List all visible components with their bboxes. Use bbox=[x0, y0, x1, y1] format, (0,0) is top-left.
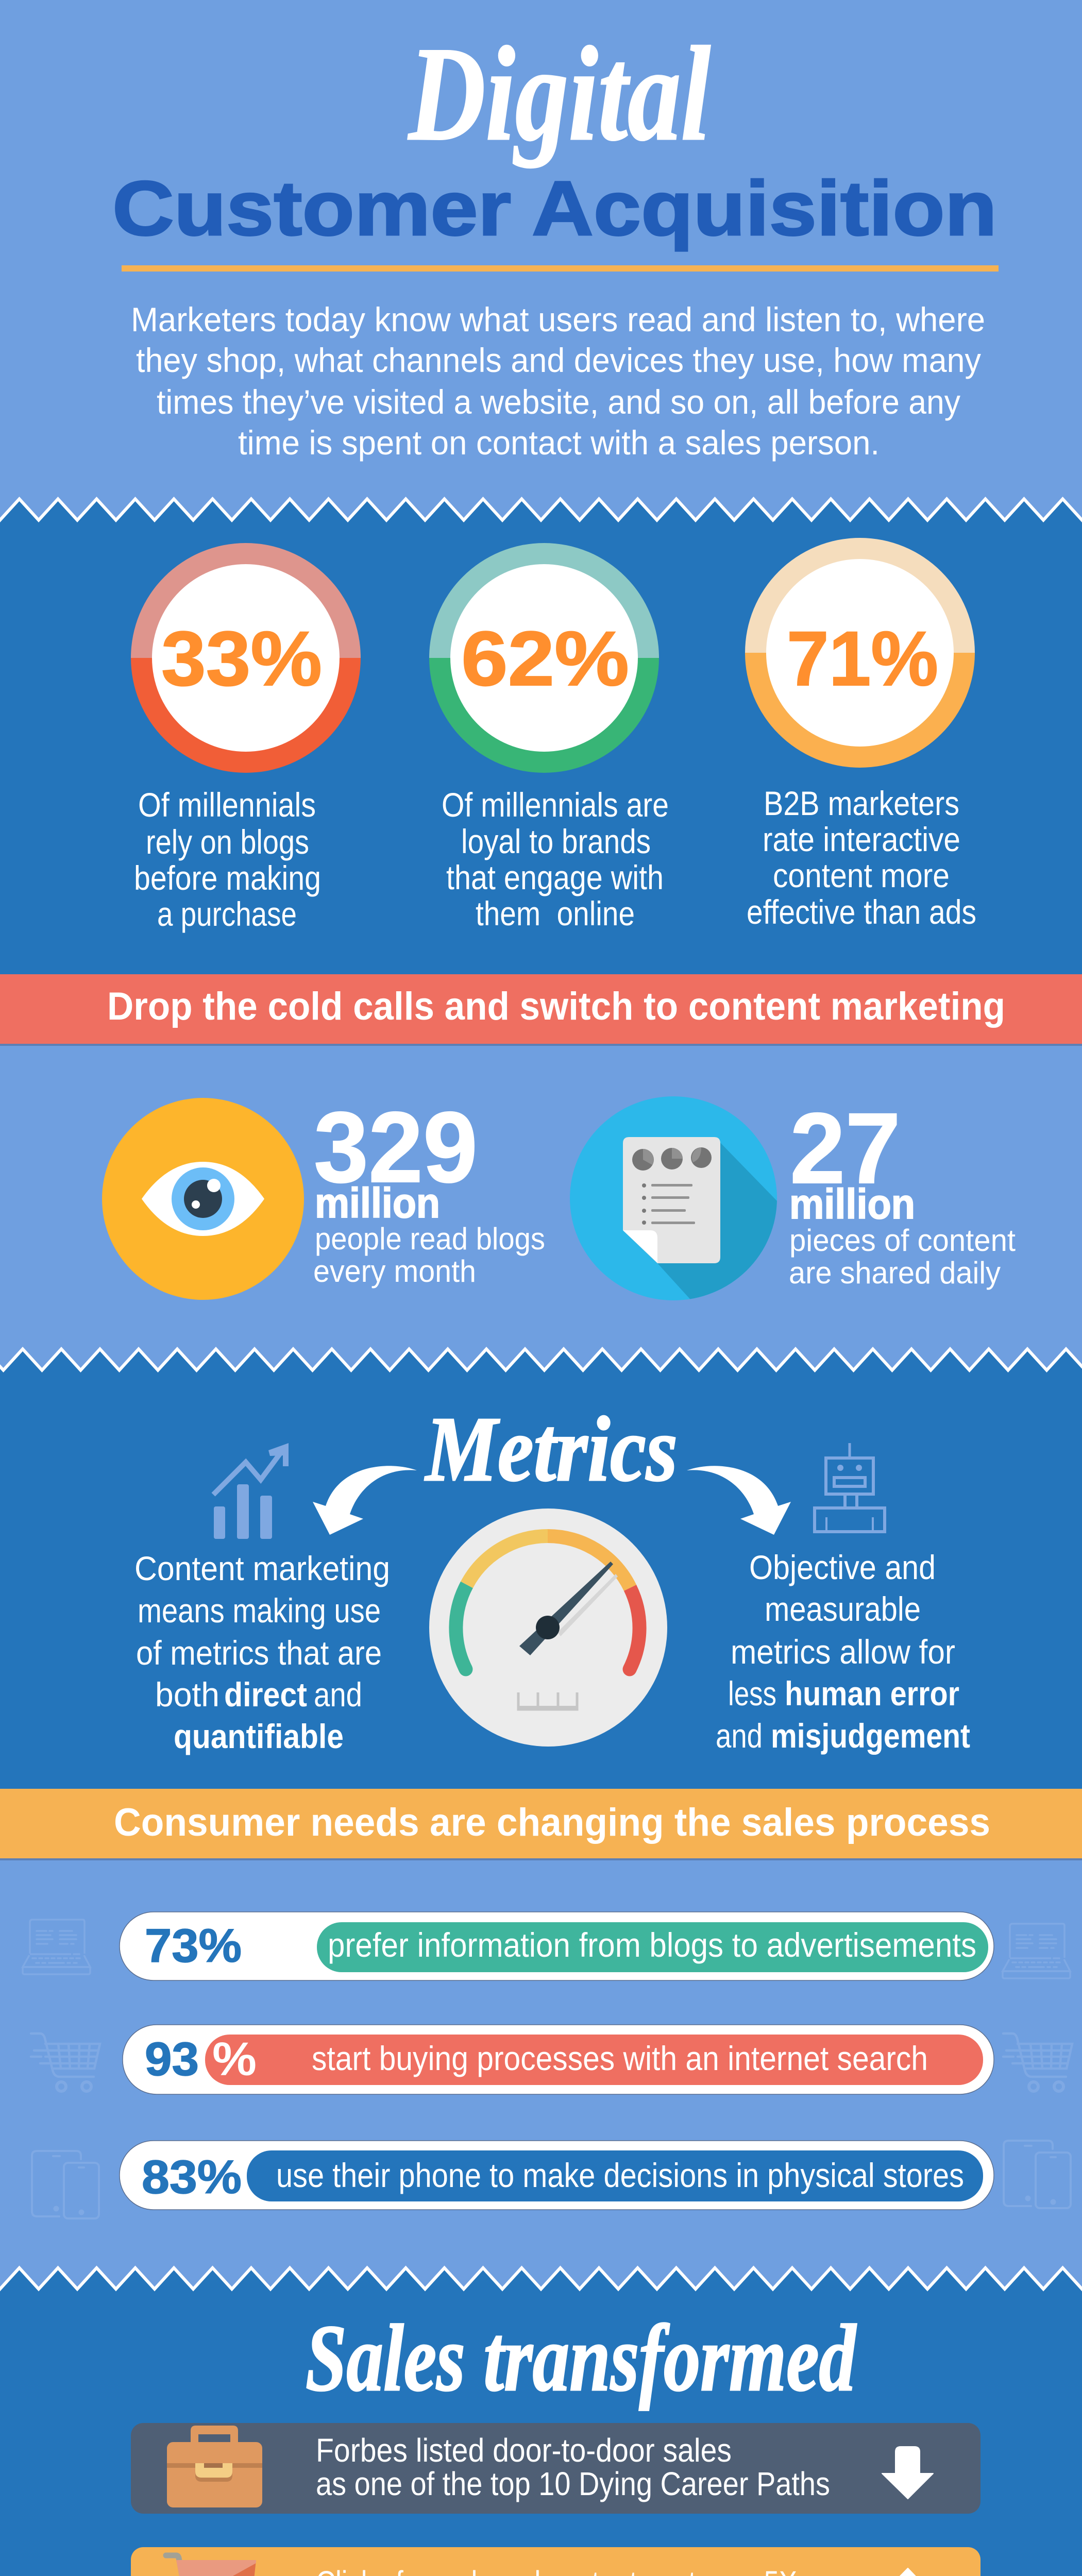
title underline bbox=[122, 265, 999, 272]
stat: 329 million: million bbox=[315, 1180, 440, 1227]
stat: 27 million: 27 bbox=[790, 1092, 901, 1205]
icon: speedometer gauge bbox=[429, 1509, 667, 1747]
icon: faint laptop right bbox=[1003, 1924, 1070, 1978]
panel: millennial statistics bbox=[0, 499, 1082, 974]
icon: faint laptop left bbox=[23, 1920, 90, 1974]
stat text: 33%: a purchase bbox=[157, 895, 297, 933]
arrow: down bbox=[882, 2447, 933, 2499]
text: content marketing metrics: Content marketing bbox=[134, 1549, 390, 1587]
arrow: up bbox=[882, 2568, 933, 2576]
pill: 93%: 93 bbox=[145, 2033, 199, 2086]
stat text: 71%: rate interactive bbox=[763, 820, 960, 858]
icon: growth chart bbox=[213, 1443, 289, 1539]
pill: 83%: 83% bbox=[142, 2151, 242, 2204]
icon: faint cart left bbox=[31, 2033, 100, 2091]
row: door-to-door sales bbox=[131, 2423, 980, 2514]
stat text: 33% bbox=[134, 786, 321, 933]
title: Customer Acquisition: Customer Acquisition bbox=[112, 165, 997, 251]
stat text: 33%: rely on blogs bbox=[146, 823, 309, 861]
stat: 27 million: pieces of content bbox=[789, 1223, 1016, 1258]
stat text: 71%: content more bbox=[773, 856, 950, 894]
icon: eye bbox=[102, 1098, 304, 1300]
text: objective metrics: measurable bbox=[765, 1590, 921, 1628]
arrow: right curved bbox=[687, 1466, 791, 1535]
icon: briefcase bbox=[167, 2426, 262, 2507]
pill: 73% bbox=[120, 1912, 994, 1980]
stat ring: 71% bbox=[745, 538, 975, 768]
text: objective metrics: metrics allow for bbox=[731, 1633, 955, 1671]
stat text: 62%: them online bbox=[476, 894, 635, 933]
text: content marketing metrics: direct bbox=[224, 1675, 307, 1714]
text: content marketing metrics: quantifiable bbox=[174, 1717, 344, 1755]
text: objective metrics: Objective and bbox=[749, 1548, 936, 1586]
stat text: 33%: before making bbox=[134, 859, 321, 897]
panel: sales transformed bbox=[0, 2268, 1082, 2576]
stat text: 33%: Of millennials bbox=[138, 786, 316, 824]
pill: 93% bbox=[123, 2025, 994, 2094]
text: objective metrics: human error bbox=[785, 1674, 959, 1713]
panel: consumer needs pills bbox=[23, 1912, 1072, 2218]
stat: 27 million: are shared daily bbox=[789, 1256, 1001, 1290]
intro paragraph: time is spent on contact with a sales person. bbox=[238, 423, 880, 462]
stat: 329 million bbox=[313, 1091, 545, 1289]
text: content marketing metrics: both bbox=[155, 1675, 219, 1714]
stat ring: 62% bbox=[429, 543, 659, 773]
text: content marketing metrics: means making use bbox=[138, 1591, 381, 1630]
intro paragraph: Marketers today know what users read and listen to, where bbox=[131, 300, 985, 338]
icon: faint devices right bbox=[1004, 2141, 1071, 2208]
stat: 27 million: million bbox=[789, 1181, 915, 1228]
title: Digital: Digital bbox=[407, 19, 711, 168]
header section bbox=[112, 19, 999, 462]
icon: faint devices left bbox=[32, 2151, 99, 2218]
stat: 329 million: people read blogs bbox=[315, 1222, 545, 1256]
row: shared content clicks bbox=[131, 2547, 980, 2576]
icon: shopping cart bbox=[166, 2555, 258, 2576]
text: content marketing metrics bbox=[134, 1549, 390, 1755]
intro paragraph: they shop, what channels and devices they use, how many bbox=[136, 341, 981, 379]
heading: Sales transformed: Sales transformed bbox=[306, 2306, 857, 2411]
text: content marketing metrics: of metrics that are bbox=[136, 1634, 382, 1672]
stat text: 71%: effective than ads bbox=[747, 893, 976, 931]
pill: 83%: use their phone to make decisions in physical stores bbox=[276, 2156, 964, 2194]
row: door-to-door sales: Forbes listed door-to-door sales bbox=[316, 2432, 732, 2469]
intro paragraph bbox=[131, 300, 985, 462]
stat text: 71% bbox=[747, 784, 976, 931]
stat ring: 62%: 62% bbox=[461, 615, 629, 702]
pill: 73%: 73% bbox=[145, 1920, 242, 1972]
pill: 93%: % bbox=[212, 2033, 257, 2086]
pill: 83% bbox=[120, 2141, 994, 2210]
banner: consumer needs bbox=[0, 1789, 1082, 1860]
text: objective metrics bbox=[716, 1548, 970, 1755]
stat text: 62%: Of millennials are bbox=[442, 786, 669, 824]
stat text: 62%: that engage with bbox=[446, 858, 664, 896]
stat: 27 million bbox=[789, 1092, 1016, 1290]
stat ring: 33%: 33% bbox=[161, 615, 322, 702]
banner: cold calls: Drop the cold calls and switch to content marketing bbox=[107, 985, 1005, 1028]
stat: 329 million: every month bbox=[313, 1254, 476, 1289]
text: objective metrics: less bbox=[728, 1674, 776, 1713]
stat ring: 33% bbox=[131, 543, 361, 773]
row: door-to-door sales: as one of the top 10 Dying Career Paths bbox=[316, 2465, 830, 2502]
panel: blog and content statistics bbox=[102, 1091, 1016, 1303]
text: objective metrics: and bbox=[716, 1717, 763, 1755]
intro paragraph: times they’ve visited a website, and so on, all before any bbox=[157, 383, 960, 421]
heading: Metrics: Metrics bbox=[424, 1398, 678, 1500]
icon: faint cart right bbox=[1003, 2033, 1072, 2091]
text: objective metrics: misjudgement bbox=[771, 1717, 970, 1755]
banner: consumer needs: Consumer needs are changing the sales process bbox=[114, 1801, 990, 1844]
stat: 329 million: 329 bbox=[314, 1091, 478, 1204]
pill: 73%: prefer information from blogs to advertisements bbox=[328, 1926, 976, 1964]
arrow: left curved bbox=[313, 1466, 417, 1535]
stat ring: 71%: 71% bbox=[787, 615, 938, 702]
icon: robot bbox=[815, 1443, 885, 1532]
text: content marketing metrics: and bbox=[314, 1675, 362, 1714]
panel: metrics bbox=[0, 1349, 1082, 1789]
stat text: 62% bbox=[442, 786, 669, 933]
pill: 93%: start buying processes with an internet search bbox=[312, 2039, 928, 2077]
stat text: 71%: B2B marketers bbox=[764, 784, 959, 822]
icon: document bbox=[570, 1096, 778, 1303]
stat text: 62%: loyal to brands bbox=[461, 822, 651, 860]
banner: cold calls bbox=[0, 974, 1082, 1046]
